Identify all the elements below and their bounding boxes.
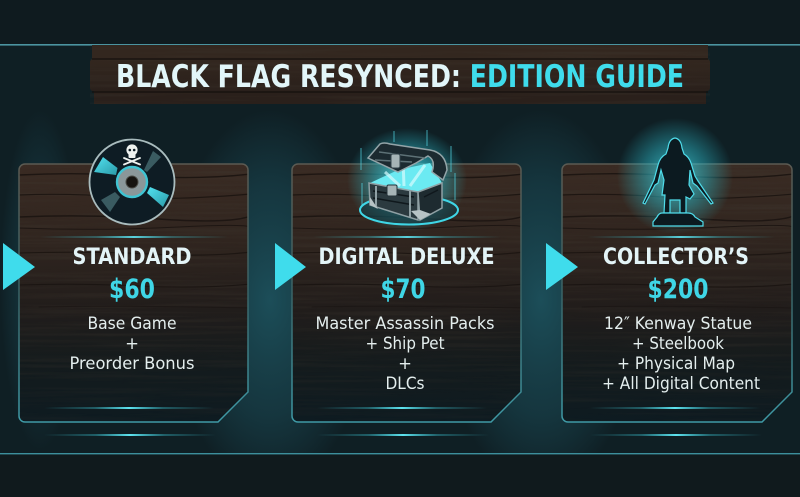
contents list: Base Game: [88, 314, 176, 333]
contents list: Preorder Bonus: [70, 354, 194, 373]
arrow: collector's: [546, 243, 578, 290]
contents list: [70, 314, 194, 373]
contents list: Master Assassin Packs: [316, 314, 494, 333]
icon: treasure chest: [347, 128, 467, 232]
contents list: + Ship Pet: [366, 334, 445, 353]
contents list: [602, 314, 760, 393]
contents list: [316, 314, 494, 393]
edition name: COLLECTOR’S: [603, 245, 749, 270]
skull and crossbones: [124, 144, 140, 164]
icon: Kenway statue: [617, 118, 733, 234]
title plank: [90, 45, 710, 104]
panel: collector's edition: [562, 164, 795, 436]
panel: standard edition: [19, 164, 252, 436]
edition name: DIGITAL DELUXE: [318, 245, 494, 270]
arrow: standard: [3, 243, 35, 290]
contents list: +: [398, 354, 412, 373]
title text: BLACK FLAG RESYNCED: EDITION GUIDE: [116, 59, 684, 95]
contents list: DLCs: [386, 374, 424, 393]
edition name: STANDARD: [72, 245, 192, 270]
contents list: 12″ Kenway Statue: [604, 314, 752, 333]
icon: pirate disc: [90, 140, 174, 224]
panel: digital deluxe edition: [292, 164, 525, 436]
contents list: + Physical Map: [617, 354, 735, 373]
contents list: + Steelbook: [632, 334, 724, 353]
price: $70: [380, 274, 426, 305]
contents list: +: [125, 334, 139, 353]
price: $200: [648, 274, 708, 305]
arrow: digital deluxe: [275, 243, 306, 290]
price: $60: [109, 274, 155, 305]
contents list: + All Digital Content: [602, 374, 760, 393]
